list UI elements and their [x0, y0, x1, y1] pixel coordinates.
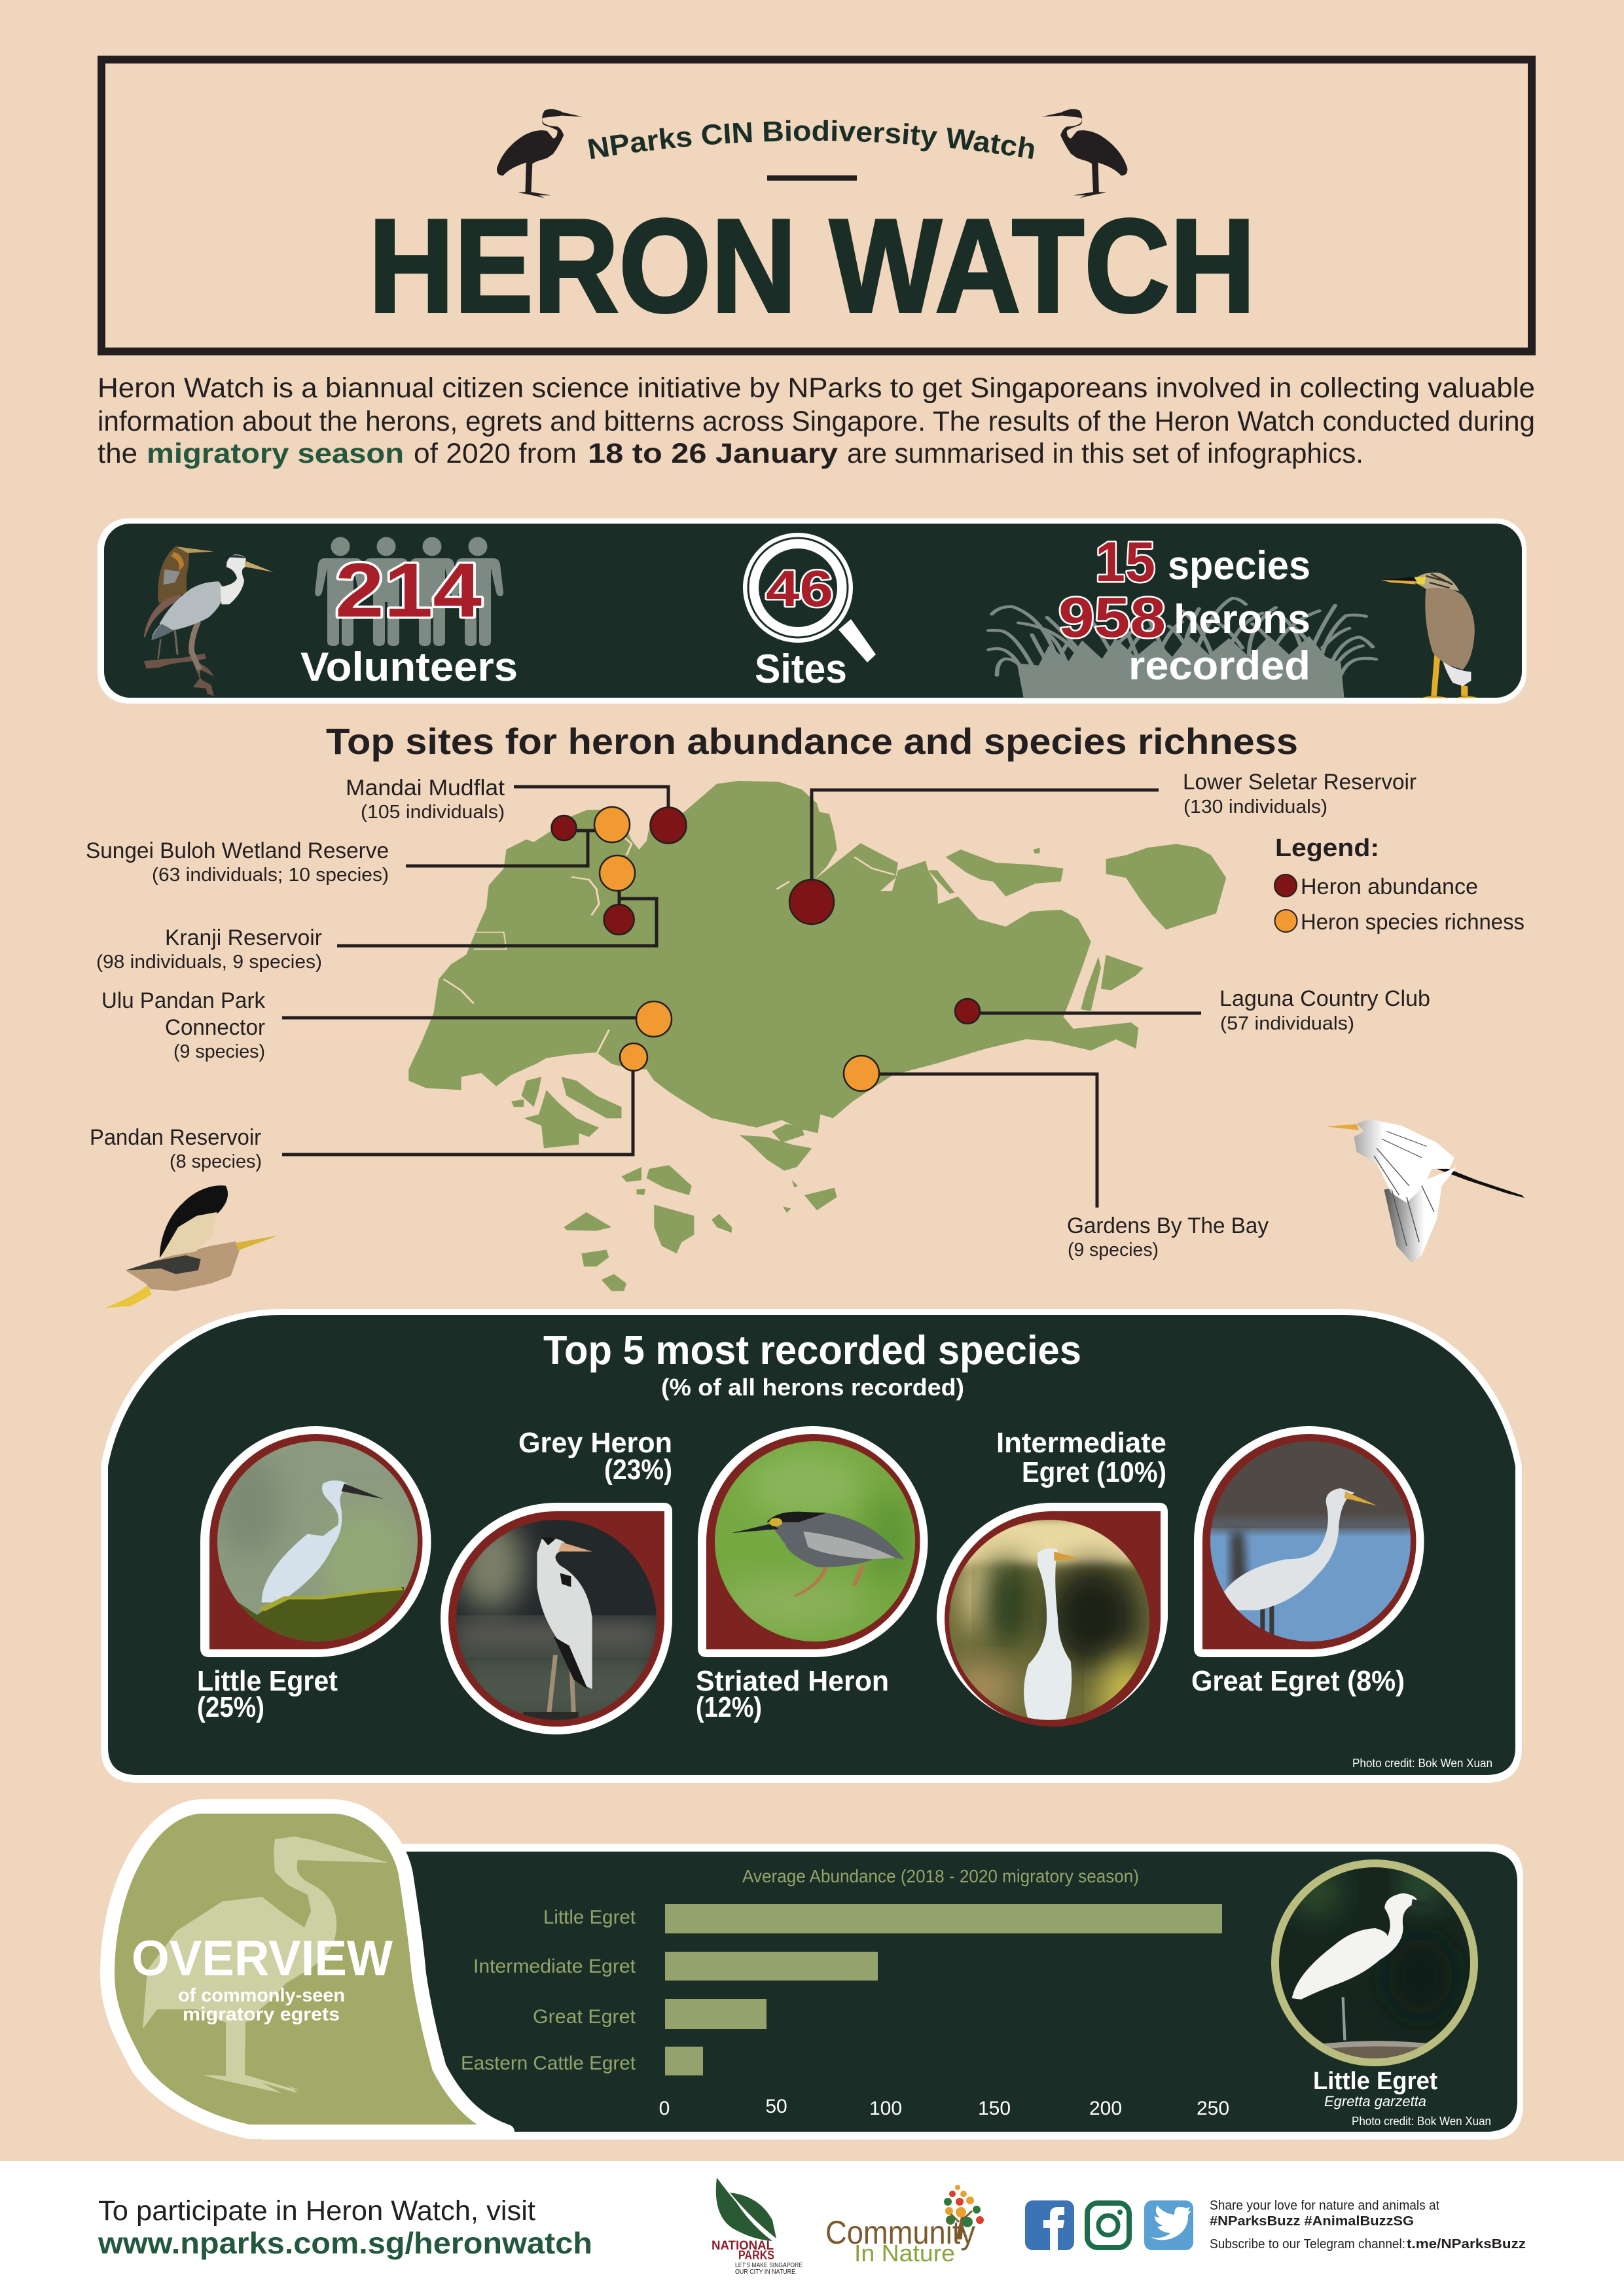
species badge: grey heron — [441, 1503, 672, 1734]
stat label: species: species — [1168, 543, 1310, 588]
label: Laguna Country Club: (57 individuals) — [1220, 1013, 1354, 1034]
label: Mandai Mudflat: Mandai Mudflat — [346, 776, 505, 800]
social text: Share your love for nature and animals at — [1210, 2198, 1439, 2213]
logo: National Parks: OUR CITY IN NATURE — [735, 2269, 795, 2276]
label: Lower Seletar Reservoir — [1183, 770, 1416, 817]
footer — [0, 2161, 1624, 2296]
overview subtitle: migratory egrets — [183, 2004, 340, 2025]
label: grey heron — [518, 1427, 672, 1486]
logo: Community In Nature: Community — [825, 2214, 975, 2251]
axis labels: 0 — [659, 2098, 670, 2119]
icon: perched grey and purple herons — [144, 547, 273, 696]
logo: National Parks: PARKS — [738, 2249, 774, 2263]
icon: Instagram — [1087, 2203, 1129, 2248]
axis labels: 250 — [1197, 2098, 1229, 2119]
axis labels: 150 — [978, 2098, 1011, 2119]
label: Gardens By The Bay: (9 species) — [1068, 1240, 1159, 1261]
bar labels — [461, 1907, 636, 2074]
panel subheading: (% of all herons recorded) — [661, 1374, 964, 1401]
stat: 15: 15 — [1095, 531, 1155, 594]
logo: National Parks: NATIONAL — [712, 2239, 774, 2253]
map legend: Heron species richness — [1301, 910, 1525, 935]
label: Lower Seletar Reservoir: (130 individuals) — [1183, 797, 1327, 817]
label: Sungei Buloh Wetland Reserve — [86, 838, 389, 886]
label: intermediate egret — [996, 1427, 1166, 1488]
icon: four people — [315, 537, 503, 646]
icon: heron silhouette — [143, 1837, 388, 2093]
label: Gardens By The Bay: Gardens By The Bay — [1067, 1213, 1269, 1238]
intro text block: information about the herons, egrets and bitterns across Singapore. The results of the Heron Watch conducted during — [98, 406, 1535, 437]
intro text block — [98, 372, 1535, 469]
icon: heron silhouette left — [497, 109, 583, 198]
axis labels: 200 — [1089, 2098, 1122, 2119]
icon: flying bittern — [105, 1185, 278, 1308]
label: Ulu Pandan Park Connector: Connector — [165, 1015, 265, 1040]
map of Singapore — [282, 781, 1226, 1291]
label: Kranji Reservoir: (98 individuals, 9 species) — [96, 952, 322, 973]
stat: 958: 958 — [1058, 586, 1166, 649]
chart title: Average Abundance (2018 - 2020 migratory season) — [742, 1866, 1139, 1886]
axis labels — [659, 2096, 1229, 2119]
panel: top 5 species — [101, 1309, 1522, 1783]
label: Mandai Mudflat — [346, 776, 505, 823]
label: Gardens By The Bay — [1067, 1213, 1269, 1261]
species badge: striated heron — [698, 1426, 928, 1657]
stat label: herons: herons — [1174, 597, 1310, 642]
northeastern islands — [928, 844, 1226, 1011]
label: intermediate egret: Egret (10%) — [1022, 1456, 1166, 1488]
website: www.nparks.com.sg/heronwatch — [98, 2226, 592, 2260]
bar labels: Great Egret — [533, 2006, 636, 2028]
logo: Community In Nature: In Nature — [854, 2240, 955, 2267]
panel: overview of migratory egrets — [107, 1806, 1523, 2140]
overview subtitle — [178, 1985, 345, 2025]
panel: key statistics — [98, 518, 1526, 704]
map legend: Heron abundance — [1301, 874, 1478, 899]
icon: standing pond heron — [1381, 573, 1479, 698]
intro text block: 18 to 26 January — [588, 438, 838, 469]
stat label: sites: Sites — [755, 647, 847, 692]
logo: National Parks: LET'S MAKE SINGAPORE — [735, 2262, 803, 2269]
social text: t.me/NParksBuzz — [1407, 2237, 1526, 2251]
stat: 46: 46 — [766, 560, 833, 617]
bars — [665, 1904, 1222, 2075]
icon: Twitter — [1144, 2200, 1193, 2250]
axis labels: 50 — [765, 2096, 787, 2117]
label: Lower Seletar Reservoir: Lower Seletar Reservoir — [1183, 770, 1416, 795]
label: Pandan Reservoir: Pandan Reservoir — [90, 1125, 261, 1150]
stat: 214: 214 — [335, 547, 482, 633]
label: Ulu Pandan Park Connector: Ulu Pandan Park — [101, 988, 266, 1013]
arched subtitle: NParks CIN Biodiversity Watch — [588, 120, 1034, 159]
stat label: recorded: recorded — [1128, 643, 1310, 689]
label: Ulu Pandan Park Connector: (9 species) — [173, 1041, 265, 1062]
intro text block: the — [98, 438, 137, 469]
label: Ulu Pandan Park Connector — [101, 988, 266, 1062]
axis labels: 100 — [869, 2098, 902, 2119]
photo caption: Photo credit: Bok Wen Xuan — [1352, 2115, 1491, 2128]
map legend — [1274, 834, 1525, 935]
label: Mandai Mudflat: (105 individuals) — [361, 802, 505, 823]
overview subtitle: of commonly-seen — [178, 1985, 345, 2006]
icon: magnifying glass — [743, 533, 876, 662]
logo: National Parks — [712, 2178, 803, 2276]
label: Sungei Buloh Wetland Reserve: (63 individuals; 10 species) — [152, 865, 389, 886]
logo: Community In Nature — [825, 2185, 984, 2267]
label: Laguna Country Club: Laguna Country Club — [1219, 986, 1430, 1011]
label: Kranji Reservoir: Kranji Reservoir — [165, 925, 322, 950]
Jurong Island and southern islands — [511, 1077, 837, 1291]
intro text block: Heron Watch is a biannual citizen science initiative by NParks to get Singaporeans involved in collecting valuable — [98, 372, 1535, 404]
intro text block: migratory season — [147, 438, 404, 469]
species badge: great egret — [1194, 1426, 1424, 1657]
participate text: To participate in Heron Watch, visit — [98, 2195, 535, 2227]
bar labels: Little Egret — [543, 1907, 636, 1928]
photo caption: Little Egret — [1313, 2068, 1437, 2095]
icon: Facebook — [1025, 2200, 1074, 2250]
photo: little egret — [1271, 1859, 1478, 2066]
social text: #NParksBuzz #AnimalBuzzSG — [1210, 2214, 1414, 2229]
label: grey heron: Grey Heron — [518, 1427, 672, 1459]
panel heading: Top 5 most recorded species — [543, 1328, 1081, 1373]
label: little egret: Little Egret — [197, 1665, 338, 1697]
bar labels: Eastern Cattle Egret — [461, 2053, 636, 2074]
heading: top sites: Top sites for heron abundance and species richness — [326, 721, 1298, 762]
icon: heron silhouette right — [1041, 109, 1127, 198]
label: intermediate egret: Intermediate — [996, 1427, 1166, 1459]
label: Pandan Reservoir: (8 species) — [170, 1151, 262, 1172]
species badge: little egret — [200, 1426, 431, 1657]
stat label: volunteers: Volunteers — [300, 645, 518, 690]
social text — [1210, 2198, 1526, 2251]
label: Pandan Reservoir — [90, 1125, 262, 1172]
intro text block: of 2020 from — [414, 438, 577, 469]
photo caption: Egretta garzetta — [1324, 2093, 1426, 2109]
header frame — [98, 56, 1536, 355]
label: Laguna Country Club — [1219, 986, 1430, 1034]
bar chart: average abundance — [461, 1866, 1229, 2119]
label: little egret: (25%) — [197, 1691, 264, 1723]
photo credit: Photo credit: Bok Wen Xuan — [1352, 1757, 1492, 1770]
label: little egret — [197, 1665, 338, 1723]
bar labels: Intermediate Egret — [473, 1956, 636, 1977]
label: Sungei Buloh Wetland Reserve: Sungei Buloh Wetland Reserve — [86, 838, 389, 863]
title: HERON WATCH — [369, 192, 1255, 340]
overview title: OVERVIEW — [132, 1931, 393, 1986]
social text: Subscribe to our Telegram channel: — [1210, 2237, 1405, 2251]
label: striated heron — [696, 1665, 889, 1723]
photo caption — [1313, 2068, 1491, 2128]
label: striated heron: Striated Heron — [696, 1665, 889, 1697]
label: grey heron: (23%) — [604, 1454, 672, 1486]
label: Kranji Reservoir — [96, 925, 322, 973]
label: great egret: Great Egret (8%) — [1191, 1665, 1405, 1697]
icon: grass — [988, 598, 1376, 698]
leader lines — [282, 787, 1201, 1208]
label: striated heron: (12%) — [696, 1691, 762, 1723]
icon: flying egret — [1326, 1119, 1525, 1263]
olive overview tab — [107, 1806, 507, 2132]
species badge: intermediate egret — [937, 1503, 1168, 1734]
map legend: Legend: — [1275, 834, 1379, 862]
site markers — [551, 807, 980, 1091]
intro text block: are summarised in this set of infographics. — [847, 438, 1363, 469]
